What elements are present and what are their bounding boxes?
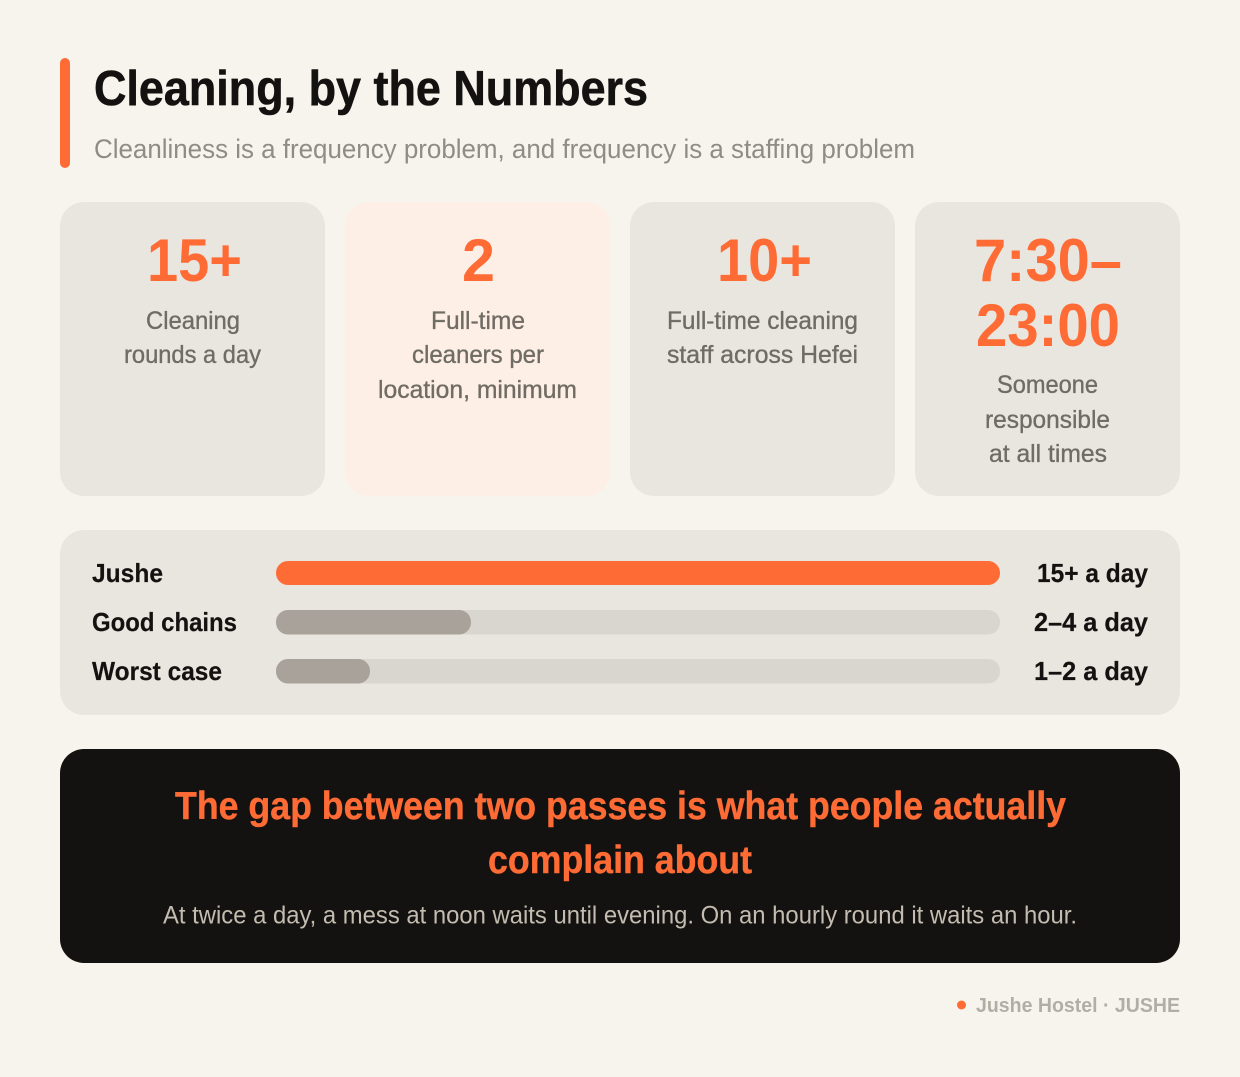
stat: 7:30–23:00: 23:00 — [976, 292, 1120, 359]
stat: 15+: 15+ — [147, 227, 242, 294]
header — [60, 58, 915, 168]
row: Good chains: 2–4 a day — [1034, 607, 1149, 637]
panel: cleaners per location — [345, 202, 610, 496]
panel: staff across Hefei — [630, 202, 895, 496]
stat label: cleaners per — [412, 341, 544, 369]
panel: hours — [915, 202, 1180, 496]
stat label: Full-time cleaning — [667, 307, 858, 335]
subtitle: Cleanliness is a frequency problem, and frequency is a staffing problem — [94, 134, 915, 164]
title: Cleaning, by the Numbers — [94, 62, 648, 116]
brand text: Jushe Hostel · JUSHE — [976, 995, 1180, 1017]
stat label: Full-time — [431, 307, 525, 335]
callout heading: complain about — [488, 839, 752, 882]
row: Worst case: Worst case — [92, 656, 222, 686]
row: Worst case — [92, 656, 1149, 686]
stat: 2: 2 — [462, 227, 495, 294]
stat: 7:30–23:00: 7:30– — [974, 227, 1122, 294]
row: Jushe — [92, 558, 1149, 588]
accent bar — [60, 58, 70, 168]
callout heading: The gap between two passes is what people actually — [175, 785, 1066, 828]
stat label: staff across Hefei — [667, 341, 858, 369]
stat label: responsible — [985, 406, 1110, 434]
callout text: At twice a day, a mess at noon waits until evening. On an hourly round it waits an hour. — [163, 902, 1077, 930]
callout — [60, 749, 1180, 963]
stat label: rounds a day — [124, 341, 261, 369]
stat label: location, minimum — [378, 376, 577, 404]
panel: cleaning rounds — [60, 202, 325, 496]
stat label: Cleaning — [146, 307, 240, 335]
row: Jushe: 15+ a day — [1037, 558, 1149, 588]
stat: 10+: 10+ — [717, 227, 812, 294]
panel: frequency comparison bar chart — [60, 530, 1180, 715]
row: Jushe: Jushe — [92, 558, 163, 588]
row: Good chains: Good chains — [92, 607, 237, 637]
stat label: at all times — [989, 440, 1107, 468]
stat label: Someone — [997, 371, 1098, 399]
row: Worst case: 1–2 a day — [1034, 656, 1149, 686]
footer — [957, 995, 1180, 1017]
icon: dot — [957, 1000, 966, 1010]
row: Good chains — [92, 607, 1149, 637]
